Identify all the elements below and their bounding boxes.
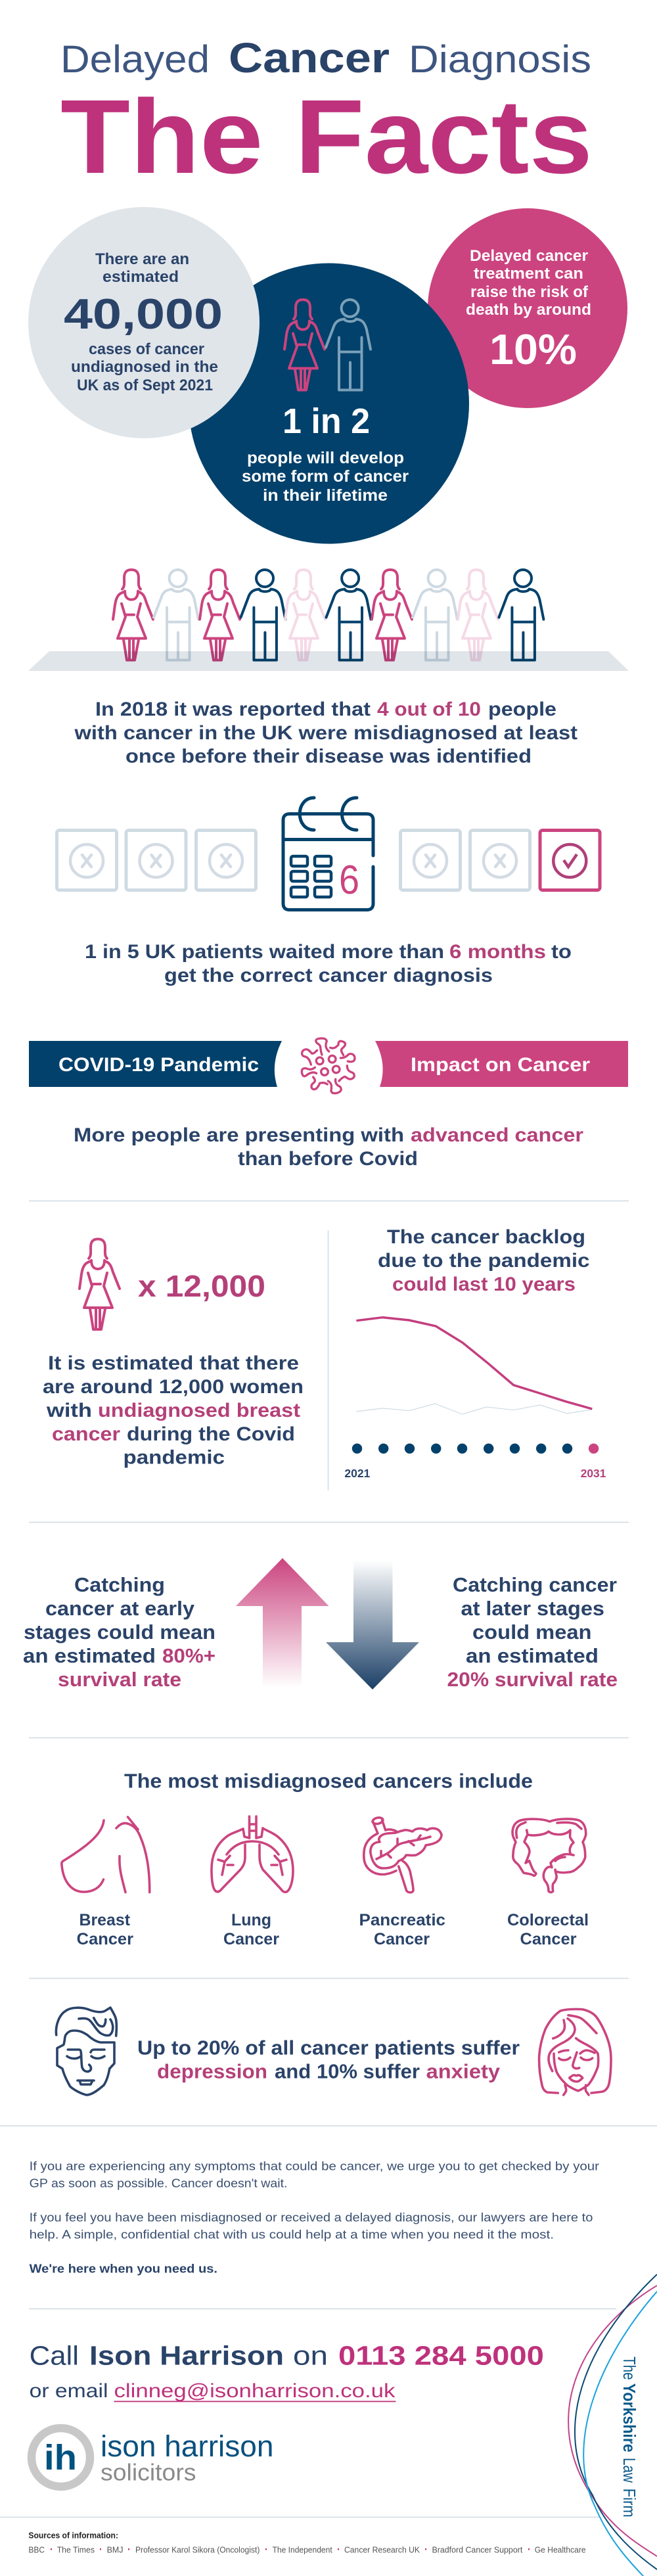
title: The Facts: The Facts: [60, 78, 593, 195]
sources of information: The Times: [57, 2544, 95, 2554]
text: undiagnosed breast cancer: during the Covid: [127, 1423, 295, 1445]
sources of information: Ge Healthcare: [535, 2544, 586, 2554]
banner: Impact on Cancer: Impact on Cancer: [411, 1054, 590, 1076]
text: advice paragraphs: If you are experiencing any symptoms that could be cancer, we urge you to get checked by your: [30, 2159, 599, 2173]
text: later stage survival: 20% survival rate: [447, 1668, 618, 1691]
text: advice paragraphs: If you feel you have been misdiagnosed or received a delayed diagnosis, our lawyers are here to: [30, 2211, 593, 2224]
text: more people presenting with advanced cancer: advanced cancer: [411, 1124, 583, 1146]
icon: man's face: [56, 2008, 116, 2095]
text: 4 out of 10 misdiagnosed: 4 out of 10: [377, 699, 481, 720]
heading: The cancer backlog: [387, 1226, 585, 1248]
text: undiagnosed breast cancer: with: [46, 1400, 92, 1421]
text: early stage survival: [23, 1574, 215, 1691]
text: early stage survival: 80%+: [162, 1645, 215, 1667]
line chart: [356, 1318, 592, 1414]
sources of information: BBC: [28, 2544, 45, 2554]
call to action: phone: Call: [30, 2340, 79, 2370]
axis labels: 2031: [581, 1467, 606, 1480]
panel: pink circle 10% risk: raise the risk of: [470, 283, 589, 301]
panel: grey circle 40,000 undiagnosed: UK as of Sept 2021: [77, 377, 213, 394]
panel: navy circle 1 in 2: people will develop: [247, 449, 404, 467]
text: depression and anxiety: [137, 2036, 520, 2082]
panel: grey circle 40,000 undiagnosed: [28, 207, 260, 438]
logo: ison harrison solicitors: [32, 2428, 273, 2487]
stat: x 12,000: x 12,000: [138, 1269, 265, 1303]
icon: pancreas: [364, 1817, 442, 1893]
text: undiagnosed breast cancer: pandemic: [124, 1447, 225, 1468]
call to action: phone: on: [293, 2340, 328, 2370]
text: early stage survival: stages could mean: [24, 1621, 215, 1644]
panel: grey circle 40,000 undiagnosed: undiagnosed in the: [71, 358, 218, 376]
text: depression and anxiety: and 10% suffer: [275, 2059, 420, 2082]
panel: pink circle 10% risk: [428, 208, 627, 408]
text: advice paragraphs: help. A simple, confidential chat with us could help at a time when you need it the most.: [30, 2228, 554, 2242]
text: undiagnosed breast cancer: It is estimated that there: [48, 1352, 299, 1374]
text: undiagnosed breast cancer: cancer: [52, 1423, 120, 1445]
text: early stage survival: Catching: [74, 1574, 165, 1596]
item: colorectal cancer: Colorectal: [507, 1911, 589, 1929]
call to action: email: or email: [30, 2380, 108, 2402]
icon row: crossed boxes and tick: [57, 831, 600, 890]
item: pancreatic cancer: Cancer: [374, 1930, 430, 1948]
axis labels: 2021: [344, 1467, 371, 1480]
panel: navy circle 1 in 2: some form of cancer: [242, 467, 409, 486]
sources of information: Bradford Cancer Support: [432, 2544, 523, 2554]
panel: grey circle 40,000 undiagnosed: 40,000: [64, 290, 223, 338]
call to action: phone: Ison Harrison: [89, 2340, 284, 2370]
heading: most misdiagnosed cancers: The most misdiagnosed cancers include: [124, 1770, 533, 1793]
icon: colon: [512, 1819, 586, 1893]
panel: cancer backlog chart: [344, 1226, 606, 1480]
text: later stage survival: [447, 1574, 618, 1691]
sources of information: Sources of information:: [28, 2530, 118, 2540]
arrow: down: [326, 1560, 419, 1690]
text: depression and anxiety: depression: [157, 2059, 267, 2082]
banner: Impact on Cancer: [375, 1041, 628, 1087]
call to action: email: [30, 2380, 396, 2402]
item: pancreatic cancer: [359, 1817, 445, 1948]
title: Delayed Cancer Diagnosis: Diagnosis: [409, 38, 591, 81]
text: 4 out of 10 misdiagnosed: people: [488, 699, 556, 720]
text: 4 out of 10 misdiagnosed: In 2018 it was reported that: [95, 699, 371, 720]
timeline dots: [352, 1444, 599, 1454]
text: early stage survival: an estimated: [23, 1645, 156, 1667]
icon: calendar with 6: 6: [339, 858, 359, 903]
sources of information: [28, 2530, 586, 2554]
text: 4 out of 10 misdiagnosed: [74, 699, 578, 768]
text: later stage survival: Catching cancer: [453, 1574, 617, 1596]
icon row: ten people on a platform: [28, 570, 629, 671]
text: The Yorkshire Law Firm: Yorkshire: [620, 2383, 639, 2452]
text: The Yorkshire Law Firm: [620, 2357, 639, 2518]
text: 1 in 5 waited 6 months: 6 months: [449, 941, 546, 963]
sources of information: BMJ: [107, 2544, 124, 2554]
panel: grey circle 40,000 undiagnosed: There are an: [95, 250, 189, 268]
panel: grey circle 40,000 undiagnosed: cases of cancer: [89, 340, 204, 358]
call to action: phone: [30, 2340, 544, 2370]
icon: woman's face: [539, 2009, 611, 2095]
sources of information: The Independent: [272, 2544, 332, 2554]
text: more people presenting with advanced cancer: [74, 1124, 583, 1170]
banner: COVID-19 Pandemic: [29, 1041, 282, 1087]
item: pancreatic cancer: Pancreatic: [359, 1911, 445, 1929]
text: The Yorkshire Law Firm: Firm: [620, 2489, 639, 2518]
panel: pink circle 10% risk: death by around: [466, 301, 591, 319]
icon: breast: [62, 1817, 150, 1893]
text: advice paragraphs: GP as soon as possible. Cancer doesn't wait.: [30, 2176, 287, 2190]
text: undiagnosed breast cancer: [43, 1352, 304, 1468]
panel: grey circle 40,000 undiagnosed: estimated: [102, 268, 179, 286]
text: undiagnosed breast cancer: undiagnosed breast: [98, 1400, 300, 1421]
text: The Yorkshire Law Firm: Law: [620, 2458, 639, 2483]
text: later stage survival: an estimated: [466, 1645, 599, 1667]
logo: ison harrison solicitors: ison harrison: [101, 2429, 273, 2463]
text: advice paragraphs: [30, 2159, 599, 2275]
text: more people presenting with advanced cancer: More people are presenting with: [74, 1124, 404, 1146]
banner: COVID-19 Pandemic: COVID-19 Pandemic: [58, 1054, 259, 1076]
item: breast cancer: Cancer: [77, 1930, 133, 1948]
text: 1 in 5 waited 6 months: get the correct cancer diagnosis: [164, 965, 493, 986]
item: colorectal cancer: Cancer: [520, 1930, 577, 1948]
panel: navy circle 1 in 2: 1 in 2: [283, 402, 370, 441]
title: Delayed Cancer Diagnosis: Delayed: [60, 38, 210, 81]
text: depression and anxiety: anxiety: [426, 2059, 501, 2082]
icon: virus: [302, 1038, 355, 1093]
item: breast cancer: [62, 1817, 150, 1948]
item: lung cancer: Cancer: [223, 1930, 279, 1948]
axis labels: [344, 1467, 606, 1480]
text: depression and anxiety: Up to 20% of all cancer patients suffer: [137, 2036, 520, 2059]
text: The Yorkshire Law Firm: The: [620, 2357, 639, 2380]
call to action: phone: 0113 284 5000: [338, 2340, 544, 2370]
text: 4 out of 10 misdiagnosed: once before their disease was identified: [125, 745, 532, 768]
text: 1 in 5 waited 6 months: to: [551, 941, 572, 963]
text: advice paragraphs: We're here when you need us.: [30, 2261, 217, 2275]
decorative curves: brand swoosh: [568, 2274, 657, 2576]
icon: calendar with 6: [283, 798, 373, 909]
item: breast cancer: Breast: [79, 1911, 131, 1929]
arrow: up: [236, 1558, 328, 1688]
text: early stage survival: cancer at early: [45, 1598, 194, 1620]
sources of information: Cancer Research UK: [344, 2544, 420, 2554]
text: early stage survival: survival rate: [58, 1668, 181, 1691]
text: later stage survival: at later stages: [461, 1598, 604, 1620]
logo: ison harrison solicitors: solicitors: [101, 2458, 196, 2485]
call to action: email: clinneg@isonharrison.co.uk: [114, 2380, 396, 2402]
panel: pink circle 10% risk: treatment can: [474, 265, 583, 283]
icon: woman: [79, 1239, 120, 1329]
text: more people presenting with advanced cancer: than before Covid: [238, 1148, 418, 1170]
item: colorectal cancer: [507, 1819, 589, 1948]
text: 1 in 5 waited 6 months: [85, 941, 572, 986]
heading: due to the pandemic: [378, 1250, 590, 1272]
panel: pink circle 10% risk: Delayed cancer: [470, 247, 588, 265]
text: 4 out of 10 misdiagnosed: with cancer in the UK were misdiagnosed at least: [74, 722, 578, 744]
panel: navy circle 1 in 2: in their lifetime: [263, 486, 388, 505]
panel: navy circle 1 in 2: [189, 263, 469, 544]
text: 1 in 5 waited 6 months: 1 in 5 UK patients waited more than: [85, 941, 444, 963]
icon: woman and man holding hands: [284, 300, 371, 390]
item: lung cancer: [212, 1816, 293, 1948]
title: Delayed Cancer Diagnosis: [60, 34, 591, 81]
logo: ison harrison solicitors: ih: [44, 2438, 77, 2477]
heading: could last 10 years: [392, 1274, 576, 1295]
panel: 12,000 women: [43, 1239, 304, 1468]
icon: lungs: [212, 1816, 293, 1892]
panel: pink circle 10% risk: 10%: [489, 325, 577, 373]
heading: [378, 1226, 590, 1295]
item: lung cancer: Lung: [231, 1911, 271, 1929]
text: later stage survival: could mean: [472, 1621, 591, 1644]
sources of information: Professor Karol Sikora (Oncologist): [135, 2544, 260, 2554]
title: Delayed Cancer Diagnosis: Cancer: [229, 34, 390, 81]
text: undiagnosed breast cancer: are around 12,000 women: [43, 1376, 304, 1398]
